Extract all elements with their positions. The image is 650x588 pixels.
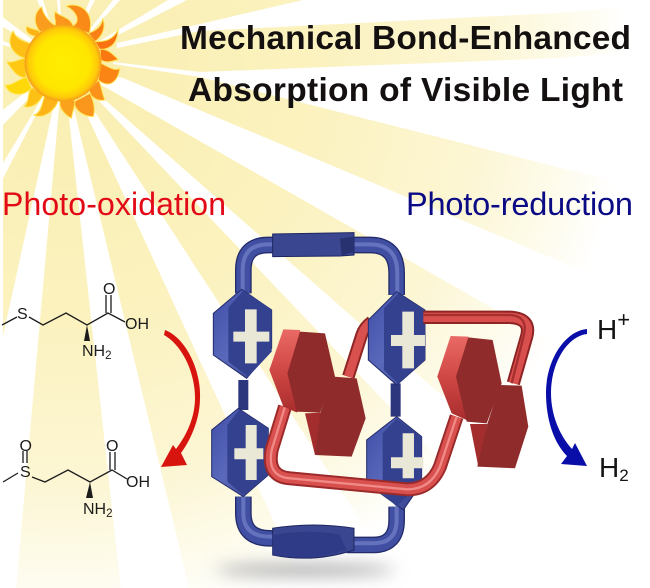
molecule: methionine: NH [82, 343, 105, 360]
bead top-left [213, 289, 272, 378]
red hexagon pair right [437, 336, 528, 468]
molecule: catenane [212, 233, 528, 558]
title: Mechanical Bond-Enhanced [180, 20, 631, 57]
title [180, 20, 631, 109]
bead top-right [368, 292, 425, 385]
bead bottom-left [212, 408, 268, 497]
molecule: methionine sulfoxide [3, 438, 150, 520]
molecule: methionine sulfoxide: S [20, 464, 31, 481]
arrow: oxidation [161, 330, 200, 467]
molecule: methionine: OH [125, 316, 149, 333]
linker bar top [273, 233, 354, 257]
icon: sun [5, 5, 120, 118]
molecule: methionine sulfoxide: O [20, 438, 32, 455]
heading: photo-reduction: Photo-reduction [406, 186, 633, 222]
molecule: methionine: S [17, 306, 28, 323]
bead bottom-right [367, 417, 422, 510]
red hexagon pair left [269, 329, 366, 457]
molecule: methionine [2, 281, 149, 362]
label: H+: + [617, 307, 630, 332]
red tube behind top-right bead [348, 322, 372, 377]
label: H2: H [599, 452, 619, 483]
molecule: methionine: O [103, 281, 115, 298]
molecule: methionine sulfoxide: OH [126, 474, 150, 491]
arrow: reduction [546, 329, 587, 466]
molecule: methionine sulfoxide: 2 [106, 508, 113, 520]
plus signs [233, 309, 425, 480]
shadow [215, 564, 395, 576]
blue ring [212, 233, 425, 558]
label: H2: 2 [619, 466, 629, 485]
heading: photo-oxidation: Photo-oxidation [2, 186, 226, 222]
linker bar bottom [273, 525, 354, 558]
label: H+: H [597, 314, 617, 345]
molecule: methionine sulfoxide: O [106, 438, 118, 455]
title: Absorption of Visible Light [188, 72, 623, 109]
red ring [271, 315, 528, 489]
molecule: methionine: 2 [105, 350, 112, 362]
molecule: methionine sulfoxide: NH [83, 501, 106, 518]
